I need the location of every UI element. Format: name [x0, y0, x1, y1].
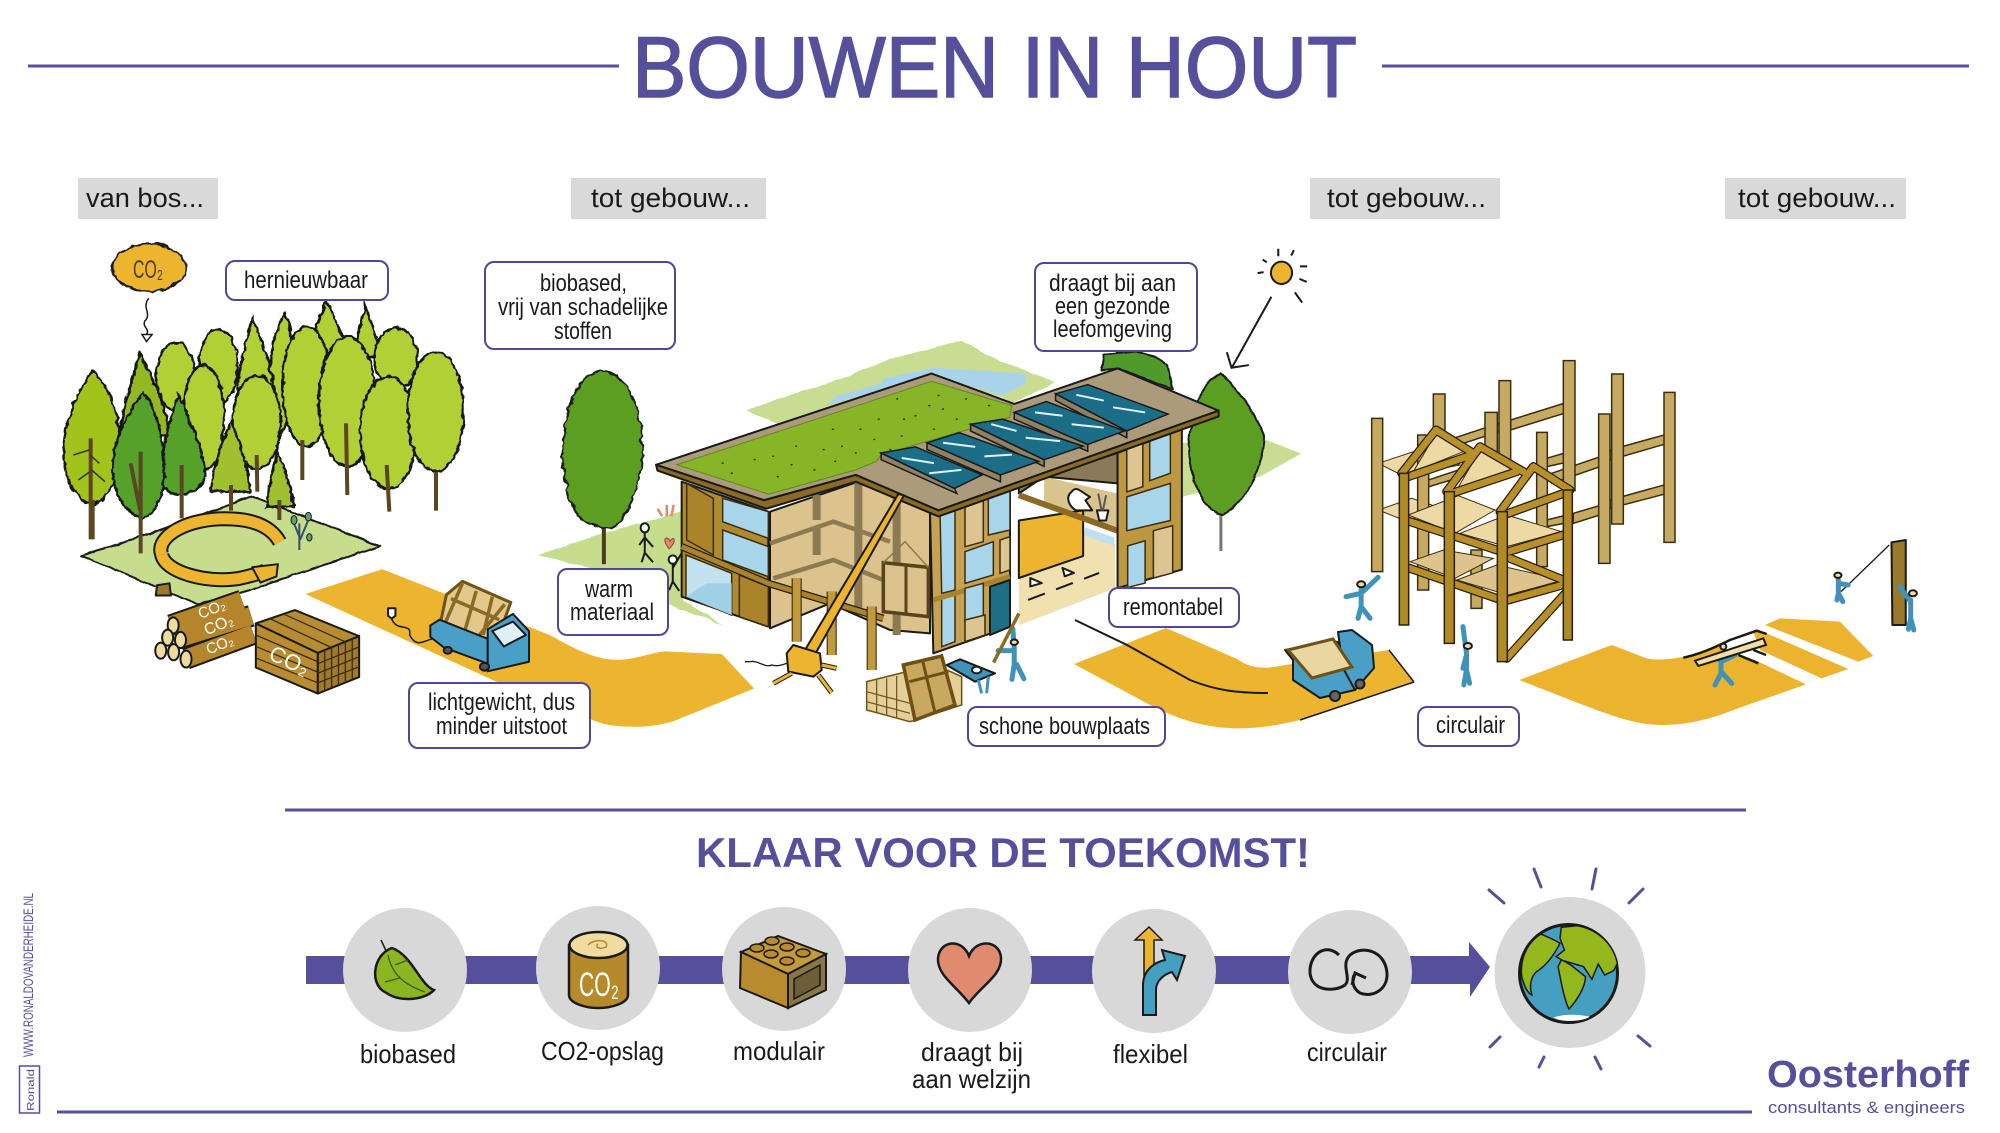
illustrator credit: Ronald — [26, 1069, 37, 1111]
globe sparkle rays — [1489, 869, 1650, 1069]
section rule — [285, 808, 1746, 812]
log pile — [155, 601, 254, 668]
stage tag: tot gebouw 1 — [571, 178, 766, 219]
worker 2 — [1463, 627, 1472, 685]
heading: klaar voor de toekomst: KLAAR VOOR DE TOEKOMST! — [696, 829, 1310, 876]
front trunks — [73, 438, 279, 553]
sapling — [291, 512, 312, 550]
illustration: road 2 with truck — [1074, 620, 1414, 728]
icon circle: biobased — [343, 908, 467, 1032]
crane — [745, 494, 904, 693]
road middle — [1753, 632, 1848, 678]
callout: lichtgewicht: minder uitstoot — [436, 713, 567, 740]
illustration: building front — [682, 482, 1010, 670]
tree stump — [156, 583, 171, 596]
stage tag: tot gebouw 3: tot gebouw... — [1738, 183, 1896, 213]
illustrator credit — [20, 893, 40, 1113]
illustration: forest scene — [81, 244, 754, 727]
callout: remontabel: remontabel — [1123, 594, 1223, 621]
icon circle: CO2 log — [536, 906, 660, 1030]
pond — [826, 368, 1026, 406]
CO2 labels on forest items: CO₂ — [204, 632, 236, 658]
timeline arrow — [306, 942, 1490, 997]
icon circle: modulair block — [722, 907, 846, 1031]
label: CO2-opslag: CO2-opslag — [541, 1036, 664, 1066]
title with rules: BOUWEN IN HOUT — [632, 20, 1357, 116]
CO2 labels on forest items: CO₂ — [265, 641, 314, 681]
CO2 labels on forest items: CO₂ — [196, 596, 228, 623]
electric truck with wood frame — [430, 581, 529, 671]
callout: biobased — [485, 262, 675, 349]
road main — [1519, 645, 1806, 725]
frame beams fill — [1402, 430, 1570, 658]
icon circle: circular loop — [1288, 910, 1412, 1034]
person with heart — [639, 523, 682, 591]
illustration: roof — [656, 249, 1307, 516]
callout: schone bouwplaats: schone bouwplaats — [979, 713, 1150, 740]
centre wall — [682, 482, 930, 670]
work table — [947, 659, 995, 693]
open bay with modules — [1019, 453, 1118, 625]
sun arrow — [1227, 297, 1271, 368]
callout: lichtgewicht: lichtgewicht, dus — [428, 689, 575, 716]
illustration: road 3 — [1519, 618, 1873, 725]
callout: warm materiaal: materiaal — [570, 599, 654, 626]
callout: circulair — [1418, 707, 1519, 746]
label: modulair: modulair — [733, 1036, 825, 1066]
dismantle line — [1075, 620, 1268, 693]
callout: warm materiaal — [558, 569, 668, 635]
label: biobased: biobased — [360, 1039, 456, 1069]
lime tree trunks — [257, 423, 436, 512]
callout: gezonde leefomgeving: leefomgeving — [1053, 316, 1172, 343]
right hill — [1182, 439, 1301, 497]
stage tag: tot gebouw 2 — [1310, 178, 1500, 219]
solar panels — [881, 385, 1168, 494]
stage tag: tot gebouw 3 — [1725, 178, 1906, 219]
green roof — [677, 381, 1012, 494]
lumber stack — [256, 610, 359, 694]
callout: gezonde leefomgeving — [1035, 263, 1197, 351]
CO2 labels on forest items — [133, 256, 314, 681]
stage tag: van bos — [78, 178, 218, 219]
olive trees — [63, 353, 293, 507]
worker 1 — [1346, 577, 1378, 618]
forest ground — [81, 496, 380, 604]
road to building — [305, 569, 754, 727]
back tree — [1101, 352, 1173, 389]
squiggle arrow — [142, 298, 152, 341]
truck with modules — [1285, 630, 1374, 701]
CO2 labels on forest items: CO₂ — [202, 612, 236, 639]
callout: gezonde leefomgeving: draagt bij aan — [1049, 270, 1176, 297]
illustration: workers and post — [1346, 540, 1917, 685]
illustration: timber frame — [1372, 361, 1675, 662]
label: draagt bij aan welzijn: draagt bij — [921, 1037, 1023, 1067]
left wing — [682, 482, 768, 627]
hanging window — [883, 542, 928, 617]
big tree — [563, 371, 642, 564]
frame beams — [1402, 430, 1570, 658]
bottom rule — [57, 1110, 1752, 1114]
background lime trees — [156, 302, 464, 489]
callout: circulair: circulair — [1436, 712, 1505, 739]
back hill — [747, 341, 1056, 424]
sun — [1258, 249, 1307, 303]
gable infill and floors — [1408, 433, 1563, 595]
callout: biobased: vrij van schadelijke — [498, 294, 668, 321]
icon circle: globe — [1494, 897, 1646, 1048]
flowers — [658, 505, 674, 516]
callout: biobased: biobased, — [540, 270, 627, 297]
callout: warm materiaal: warm — [584, 576, 633, 603]
label: draagt bij aan welzijn: aan welzijn — [912, 1064, 1031, 1094]
stage tag: tot gebouw 1: tot gebouw... — [591, 183, 750, 213]
callout: remontabel — [1109, 588, 1239, 627]
circular renewal arrow — [161, 519, 280, 583]
icon circle: flexible arrows — [1092, 909, 1216, 1033]
icon circle: heart — [908, 908, 1032, 1032]
callout: biobased: stoffen — [554, 318, 612, 345]
icon circle: CO2 log: CO₂ — [579, 966, 619, 1004]
second tree ground — [538, 511, 724, 625]
callout: lichtgewicht — [409, 683, 590, 748]
callout: hernieuwbaar: hernieuwbaar — [244, 267, 368, 294]
roof body — [656, 368, 1219, 516]
front facade — [930, 482, 1010, 653]
illustration: construction site — [745, 494, 995, 722]
illustrator credit: WWW.RONALDOVANDERHEIDE.NL — [20, 893, 36, 1057]
stage tag: van bos: van bos... — [86, 183, 204, 213]
illustration: building rear — [747, 341, 1301, 625]
illustration: worker with pole — [994, 613, 1024, 679]
logo: Oosterhoff: Oosterhoff — [1767, 1054, 1969, 1096]
label: circulair: circulair — [1307, 1037, 1387, 1067]
illustration: tree group — [63, 302, 464, 553]
stage tag: tot gebouw 2: tot gebouw... — [1327, 183, 1486, 213]
CO2 cloud — [113, 244, 186, 291]
background frame — [1372, 361, 1675, 608]
callout: hernieuwbaar — [226, 261, 388, 300]
logo: Oosterhoff — [1767, 1054, 1969, 1117]
CO2 labels on forest items: CO₂ — [133, 256, 163, 284]
road top — [1765, 618, 1873, 662]
electric plug and cable — [391, 618, 433, 643]
label: draagt bij aan welzijn — [912, 1037, 1031, 1094]
crate and window on site — [867, 656, 962, 722]
worker carrying beam — [1683, 631, 1767, 685]
label: flexibel: flexibel — [1113, 1039, 1188, 1069]
post with rope and workers — [1834, 540, 1917, 630]
right tree — [1189, 374, 1265, 551]
callout: schone bouwplaats — [968, 707, 1165, 746]
dark green pines — [113, 393, 205, 518]
callout: gezonde leefomgeving: een gezonde — [1055, 293, 1170, 320]
foreground posts — [1399, 473, 1572, 662]
right wing facade — [1118, 429, 1182, 588]
logo: Oosterhoff: consultants & engineers — [1768, 1098, 1965, 1117]
